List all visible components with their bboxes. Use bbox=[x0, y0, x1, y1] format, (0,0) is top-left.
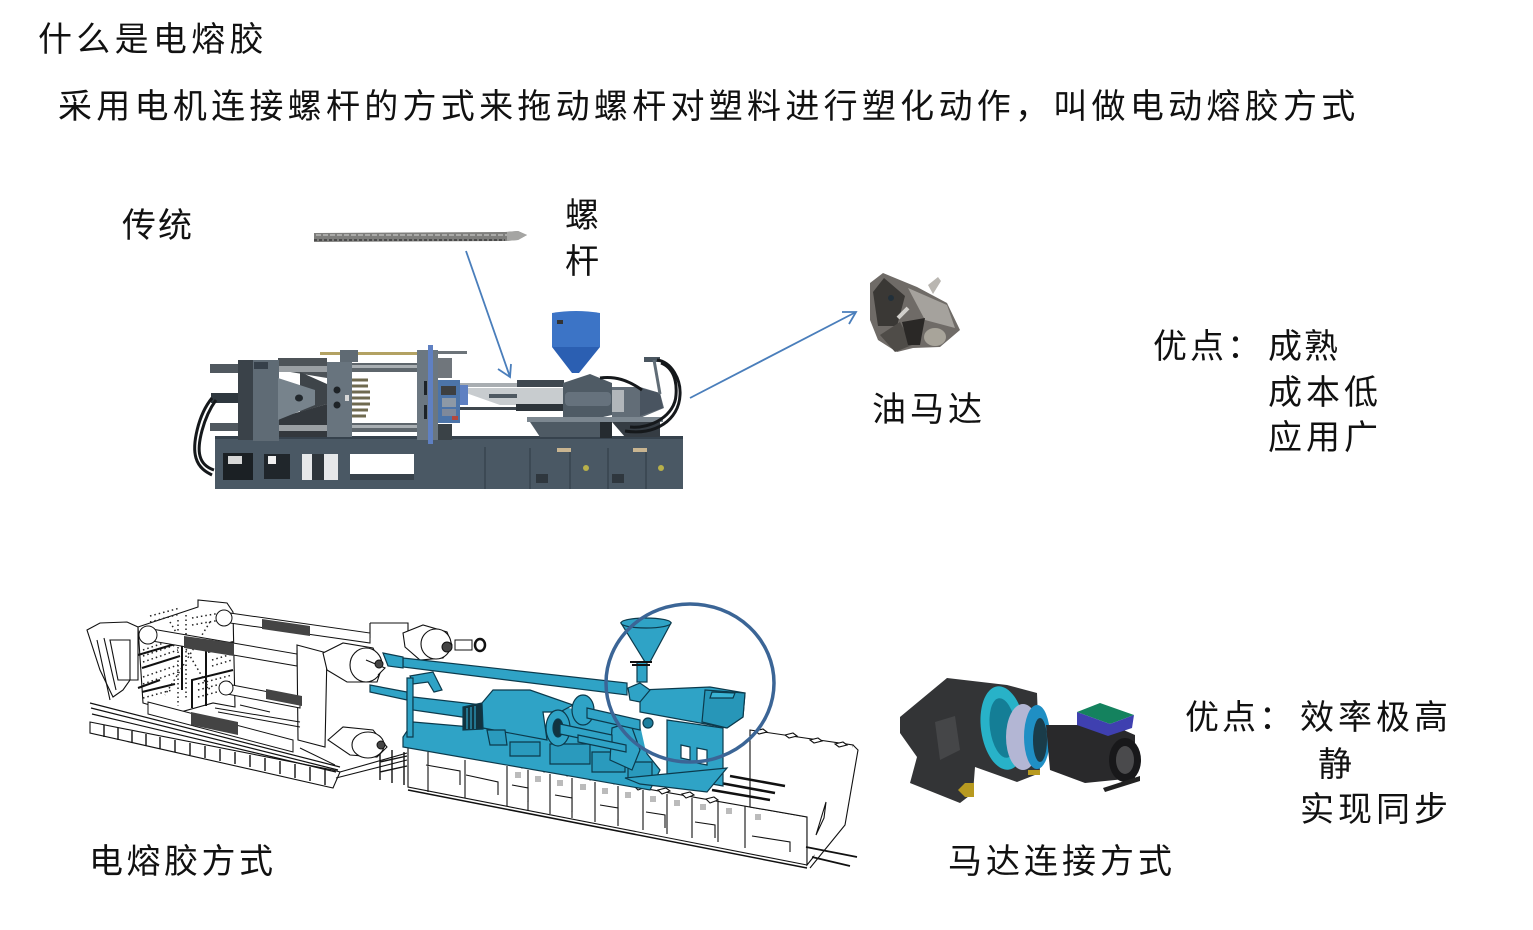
advantages: electric melt bbox=[1185, 699, 1452, 829]
advantages: electric melt: 静 bbox=[1318, 746, 1352, 784]
advantages: traditional: 应用广 bbox=[1268, 419, 1382, 457]
traditional injection molding machine bbox=[195, 311, 683, 489]
control panel bbox=[438, 380, 460, 423]
label: electric melt method: 电熔胶方式 bbox=[89, 843, 276, 881]
hoses bbox=[195, 360, 680, 475]
label: motor connection method: 马达连接方式 bbox=[948, 843, 1176, 881]
arrow: screw to barrel bbox=[466, 251, 511, 377]
platen ribs and dot patterns bbox=[138, 608, 233, 708]
label: traditional: 传统 bbox=[122, 207, 194, 245]
advantages: traditional bbox=[1153, 328, 1382, 457]
label: oil motor: 油马达 bbox=[872, 391, 986, 429]
machine base bbox=[215, 436, 683, 489]
blue injection unit bbox=[370, 618, 745, 792]
label: screw: 螺 bbox=[565, 197, 599, 235]
advantages: electric melt: 实现同步 bbox=[1300, 791, 1452, 829]
advantages: traditional: 优点： bbox=[1153, 328, 1264, 366]
electric melt machine line drawing bbox=[87, 600, 858, 868]
advantages: traditional: 成本低 bbox=[1268, 374, 1382, 412]
tie bars bbox=[210, 350, 467, 432]
definition text: 采用电机连接螺杆的方式来拖动螺杆对塑料进行塑化动作，叫做电动熔胶方式 bbox=[58, 88, 1360, 126]
highlight circle bbox=[606, 604, 774, 762]
advantages: electric melt: 效率极高 bbox=[1300, 699, 1452, 737]
arrow: machine to oil motor bbox=[690, 312, 856, 398]
injection unit bbox=[527, 357, 664, 438]
title: 什么是电熔胶 bbox=[38, 21, 268, 59]
label: screw: 杆 bbox=[565, 243, 599, 281]
hopper bbox=[552, 311, 600, 373]
injection barrel bbox=[460, 380, 564, 411]
cylinder end details bbox=[375, 639, 485, 749]
clamp unit bbox=[238, 360, 370, 441]
advantages: traditional: 成熟 bbox=[1268, 328, 1340, 366]
fixed platen bbox=[417, 345, 452, 444]
icon: motor connection assembly bbox=[900, 678, 1141, 803]
left base rail bbox=[90, 703, 407, 788]
advantages: electric melt: 优点： bbox=[1185, 699, 1296, 737]
icon: screw bbox=[314, 231, 527, 242]
clamp mechanism bbox=[278, 358, 327, 437]
tie bars bbox=[139, 610, 370, 765]
right long base bbox=[408, 729, 858, 868]
clamp platens bbox=[87, 600, 408, 747]
clamp cylinders bbox=[297, 625, 452, 758]
icon: hydraulic oil motor bbox=[870, 273, 960, 352]
label: screw bbox=[565, 197, 599, 281]
